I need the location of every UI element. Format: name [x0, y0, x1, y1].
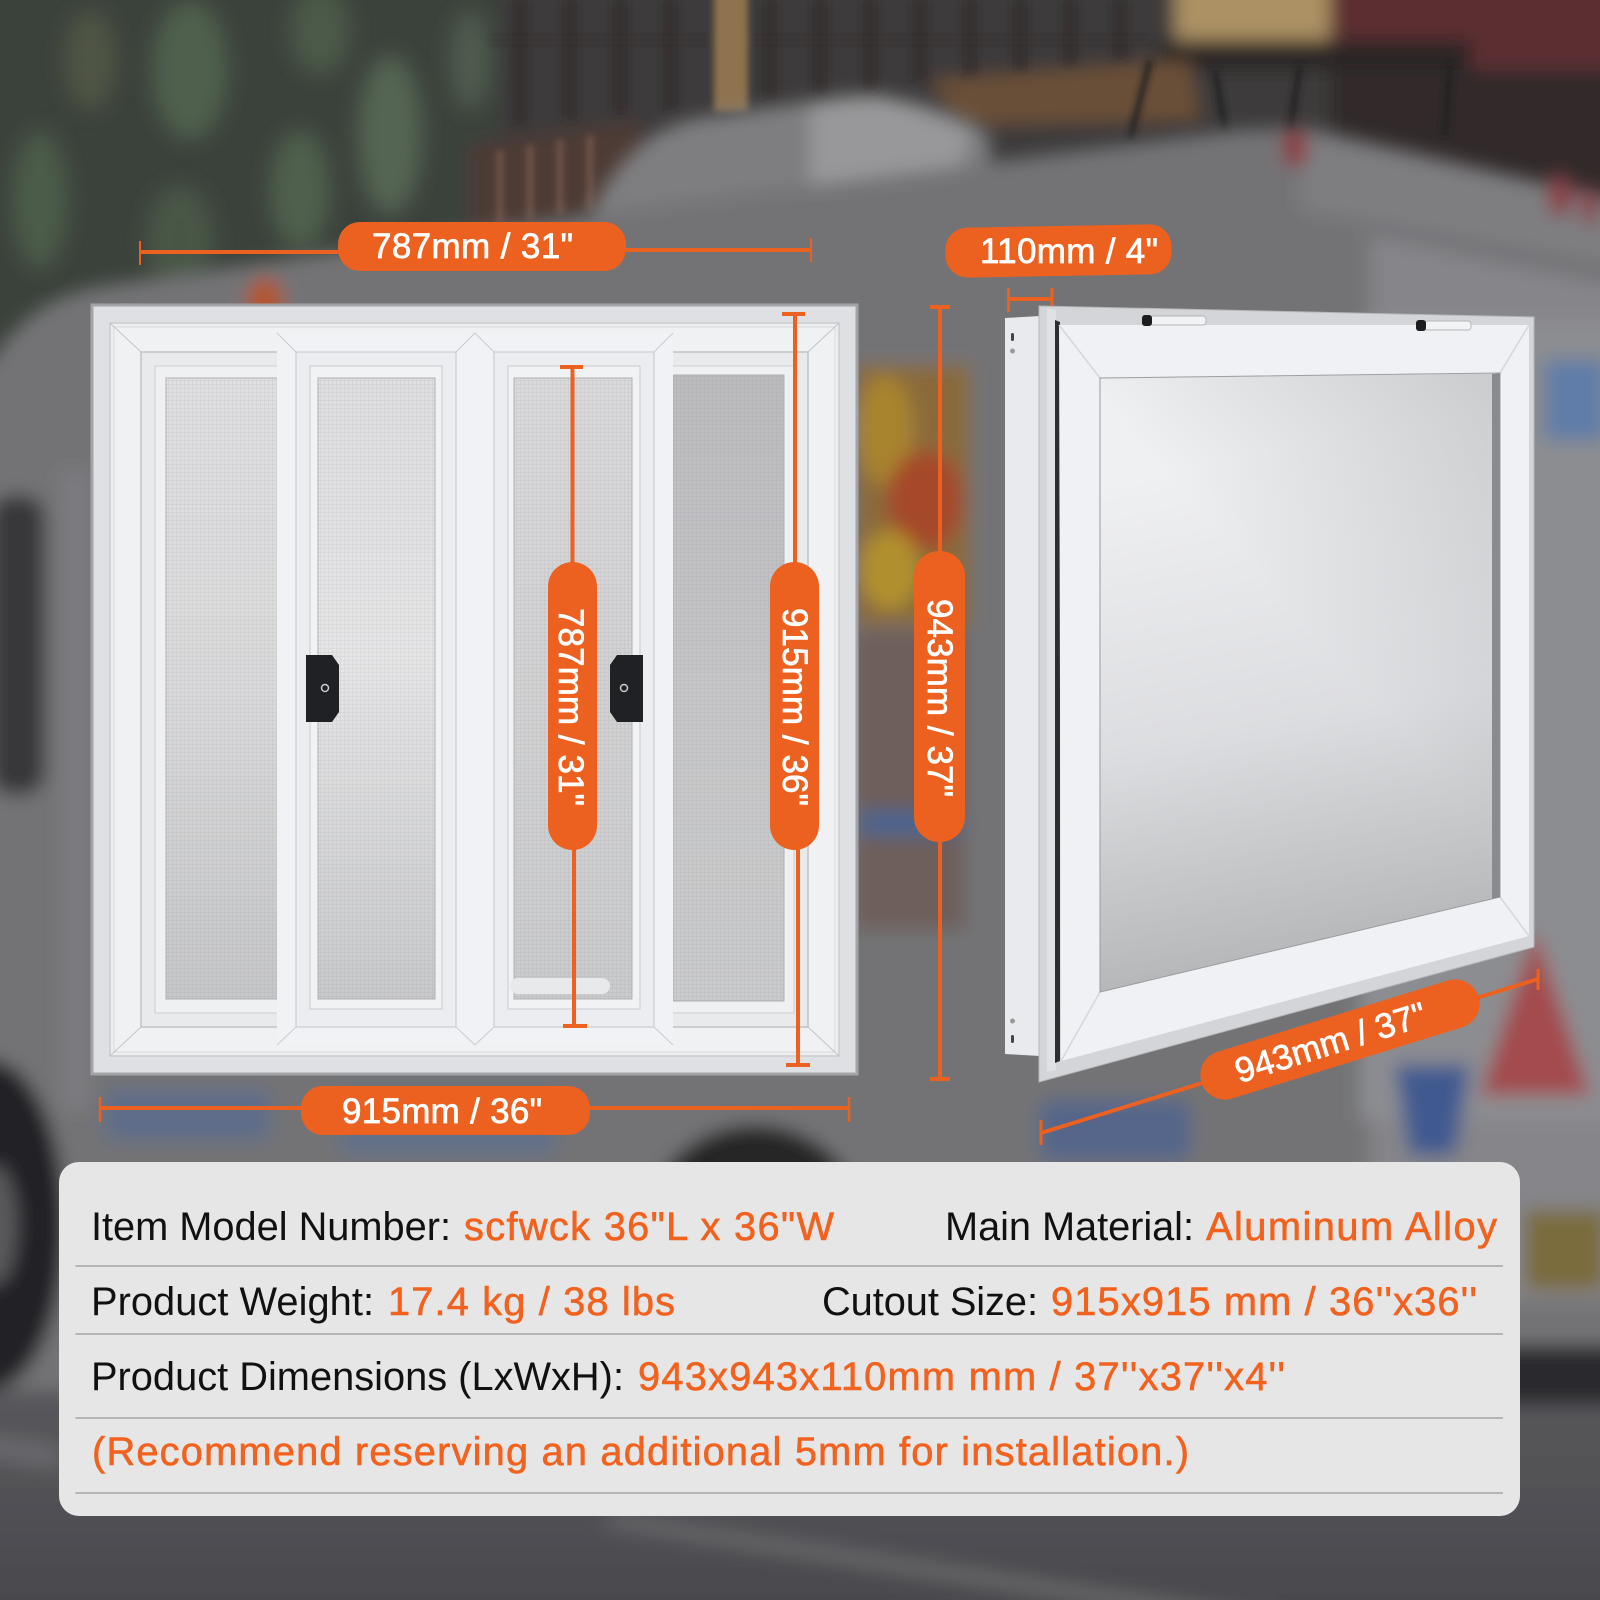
dimension: bottom width 915mm: 915mm / 36"	[342, 1092, 542, 1131]
fixed frame	[110, 323, 839, 1056]
left fixed mesh pane	[166, 378, 278, 999]
dimension: angled width 943mm	[1041, 969, 1538, 1145]
flange	[1039, 306, 1534, 1082]
dimension: depth 110mm	[945, 224, 1172, 312]
right fixed mesh pane	[673, 375, 784, 1001]
icon: left latch	[306, 655, 339, 722]
icon: right hinge	[1416, 320, 1471, 331]
icon: left hinge	[1142, 315, 1206, 326]
icon: right latch	[610, 655, 643, 722]
right sliding sash	[475, 333, 673, 1045]
dimension: outer height 943mm: 943mm / 37"	[920, 599, 959, 797]
spec row: model and material: Aluminum Alloy	[1206, 1205, 1497, 1249]
spec row: weight and cutout: Product Weight:	[91, 1280, 374, 1324]
dimension: cutout height 915mm: 915mm / 36"	[775, 608, 814, 806]
frosted glass	[1100, 373, 1500, 992]
spec row: model and material	[91, 1205, 1497, 1249]
spec row: dimensions	[91, 1355, 1285, 1399]
spec row: model and material: scfwck 36"L x 36"W	[464, 1205, 834, 1249]
outer flange	[92, 305, 857, 1074]
dimension: depth 110mm: 110mm / 4"	[980, 232, 1158, 271]
dimension: outer height 943mm	[914, 307, 965, 1079]
dimension: top width 787mm: 787mm / 31"	[372, 227, 573, 266]
spec row: model and material: Main Material:	[945, 1205, 1194, 1249]
spec row: weight and cutout: 915x915 mm / 36''x36''	[1051, 1280, 1477, 1324]
dimension: inner height 787mm	[548, 367, 597, 1026]
specification panel	[59, 1162, 1520, 1516]
side box	[1005, 316, 1040, 1056]
spec row: weight and cutout: Cutout Size:	[822, 1280, 1038, 1324]
side window: angled view of closed window	[1005, 306, 1534, 1082]
dimension: angled width 943mm: 943mm / 37"	[1230, 995, 1431, 1091]
spec row: weight and cutout: 17.4 kg / 38 lbs	[388, 1280, 675, 1324]
dimension: bottom width 915mm	[100, 1086, 849, 1135]
dimension: top width 787mm	[140, 222, 811, 271]
spec row: model and material: Item Model Number:	[91, 1205, 451, 1249]
sash frame	[1059, 325, 1529, 1061]
spec row: installation note: (Recommend reserving an additional 5mm for installation.)	[92, 1430, 1189, 1474]
spec row: dimensions: Product Dimensions (LxWxH):	[91, 1355, 624, 1399]
spec row: dimensions: 943x943x110mm mm / 37''x37''x4''	[638, 1355, 1285, 1399]
left sliding sash	[277, 333, 475, 1045]
dimension: inner height 787mm: 787mm / 31"	[551, 608, 590, 806]
spec row: weight and cutout	[91, 1280, 1477, 1324]
dimension: cutout height 915mm	[770, 314, 819, 1065]
front window: sliding screen window	[92, 305, 857, 1074]
